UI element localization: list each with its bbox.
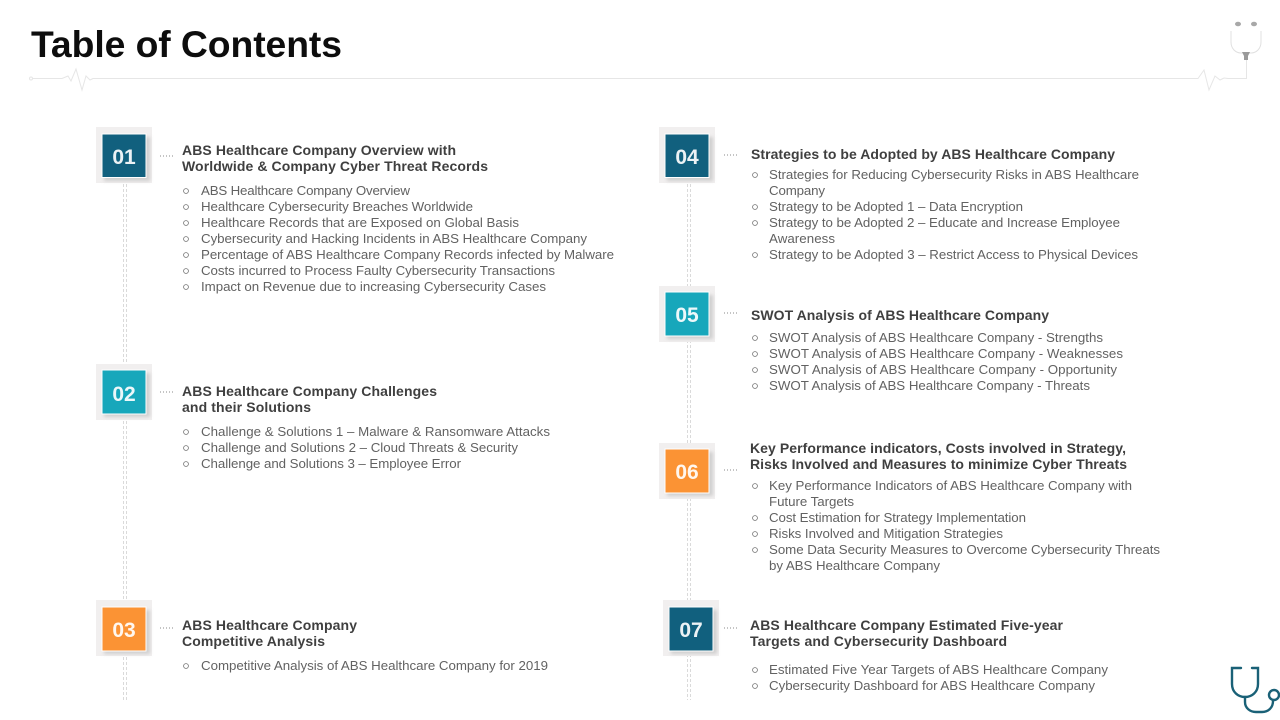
heading 03: ABS Healthcare Company	[182, 617, 357, 633]
list 01: Healthcare Cybersecurity Breaches Worldwide	[201, 199, 473, 214]
list 02: Challenge and Solutions 2 – Cloud Threats & Security	[201, 440, 518, 455]
list 05: SWOT Analysis of ABS Healthcare Company - Strengths	[769, 330, 1103, 345]
list 04: Strategies for Reducing Cybersecurity Risks in ABS Healthcare	[769, 167, 1139, 182]
panel: section 04	[659, 127, 1139, 262]
number badge 03	[96, 600, 152, 656]
vertical rail left	[124, 184, 126, 700]
number badge 06	[659, 443, 715, 499]
list 06: Cost Estimation for Strategy Implementation	[769, 510, 1026, 525]
list 01: ABS Healthcare Company Overview	[201, 183, 410, 198]
panel: section 05	[659, 286, 1123, 393]
heading 07	[750, 617, 1064, 649]
list 06: Risks Involved and Mitigation Strategies	[769, 526, 1003, 541]
list 01	[184, 183, 614, 294]
number badge 01	[96, 127, 152, 183]
heading 01: Worldwide & Company Cyber Threat Records	[182, 158, 488, 174]
list 01: Healthcare Records that are Exposed on Global Basis	[201, 215, 519, 230]
number badge 07: 07	[679, 619, 703, 642]
list 05: SWOT Analysis of ABS Healthcare Company - Opportunity	[769, 362, 1117, 377]
list 04: Awareness	[769, 231, 835, 246]
list 06: Some Data Security Measures to Overcome Cybersecurity Threats	[769, 542, 1160, 557]
heading 03	[182, 617, 357, 649]
list 07: Estimated Five Year Targets of ABS Healthcare Company	[769, 662, 1108, 677]
list 04: Strategy to be Adopted 3 – Restrict Access to Physical Devices	[769, 247, 1138, 262]
list 04: Company	[769, 183, 825, 198]
heading 06: Key Performance indicators, Costs involved in Strategy,	[750, 440, 1126, 456]
heading 05: SWOT Analysis of ABS Healthcare Company	[751, 307, 1049, 323]
heading 02: ABS Healthcare Company Challenges	[182, 383, 437, 399]
number badge 03: 03	[112, 619, 136, 642]
icon: stethoscope bottom right	[1232, 668, 1279, 712]
panel: section 01	[96, 127, 614, 294]
list 04: Strategy to be Adopted 2 – Educate and Increase Employee	[769, 215, 1120, 230]
list 01: Percentage of ABS Healthcare Company Records infected by Malware	[201, 247, 614, 262]
heading 03: Competitive Analysis	[182, 633, 325, 649]
list 02: Challenge and Solutions 3 – Employee Error	[201, 456, 462, 471]
heading 06	[750, 440, 1127, 472]
panel: section 07	[663, 600, 1108, 693]
number badge 07	[663, 600, 719, 656]
list 05: SWOT Analysis of ABS Healthcare Company - Threats	[769, 378, 1090, 393]
list 06: by ABS Healthcare Company	[769, 558, 940, 573]
list 02: Challenge & Solutions 1 – Malware & Ransomware Attacks	[201, 424, 550, 439]
header rule with heartbeat lines	[30, 60, 1246, 90]
heading 04: Strategies to be Adopted by ABS Healthcare Company	[751, 146, 1115, 162]
number badge 01: 01	[112, 146, 136, 169]
number badge 05	[659, 286, 715, 342]
list 06	[753, 478, 1160, 573]
icon: faded stethoscope top right	[1231, 22, 1261, 60]
heading 01: ABS Healthcare Company Overview with	[182, 142, 456, 158]
list 07	[753, 662, 1108, 693]
heading 07: Targets and Cybersecurity Dashboard	[750, 633, 1007, 649]
list 01: Impact on Revenue due to increasing Cybersecurity Cases	[201, 279, 546, 294]
number badge 02	[96, 364, 152, 420]
list 05	[753, 330, 1123, 393]
number badge 02: 02	[112, 383, 136, 406]
list 04: Strategy to be Adopted 1 – Data Encryption	[769, 199, 1023, 214]
list 01: Cybersecurity and Hacking Incidents in ABS Healthcare Company	[201, 231, 587, 246]
number badge 05: 05	[675, 304, 699, 327]
number badge 04: 04	[675, 146, 699, 169]
list 06: Future Targets	[769, 494, 854, 509]
heading 07: ABS Healthcare Company Estimated Five-year	[750, 617, 1064, 633]
panel: section 06	[659, 440, 1160, 573]
list 02	[184, 424, 550, 471]
list 05: SWOT Analysis of ABS Healthcare Company - Weaknesses	[769, 346, 1123, 361]
title: Table of Contents	[31, 23, 342, 65]
heading 01	[182, 142, 488, 174]
list 03: Competitive Analysis of ABS Healthcare Company for 2019	[201, 658, 548, 673]
list 04	[753, 167, 1139, 262]
panel: section 03	[96, 600, 548, 673]
list 01: Costs incurred to Process Faulty Cybersecurity Transactions	[201, 263, 555, 278]
vertical rail right	[688, 184, 690, 700]
heading 06: Risks Involved and Measures to minimize Cyber Threats	[750, 456, 1127, 472]
number badge 06: 06	[675, 461, 699, 484]
number badge 04	[659, 127, 715, 183]
list 07: Cybersecurity Dashboard for ABS Healthcare Company	[769, 678, 1095, 693]
list 06: Key Performance Indicators of ABS Healthcare Company with	[769, 478, 1132, 493]
heading 02	[182, 383, 437, 415]
panel: section 02	[96, 364, 550, 471]
heading 02: and their Solutions	[182, 399, 311, 415]
